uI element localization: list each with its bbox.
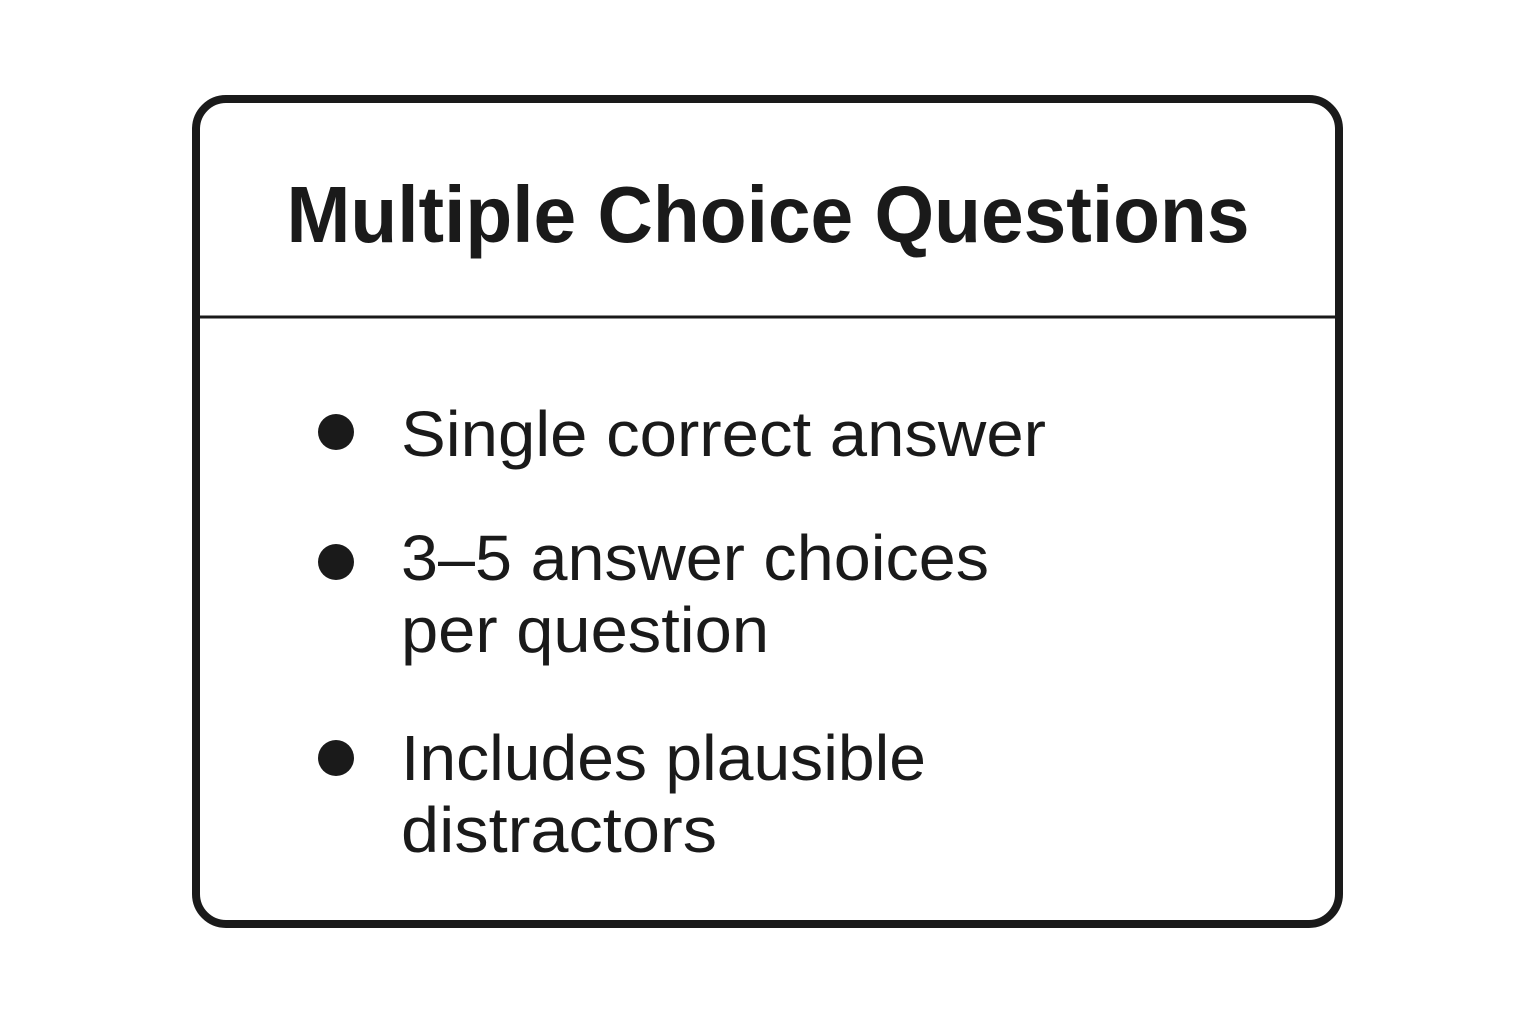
- bullet 3: Includes plausible: [401, 722, 926, 794]
- bullet 2: [318, 522, 989, 666]
- bullet 3: distractors: [401, 794, 717, 866]
- bullet list: [318, 398, 1046, 866]
- bullet 3: [318, 722, 926, 866]
- panel: multiple choice card: [196, 99, 1339, 924]
- title: Multiple Choice Questions: [286, 170, 1250, 259]
- bullet 2: 3–5 answer choices: [401, 522, 989, 594]
- bullet 2: per question: [401, 594, 769, 666]
- bullet 1: Single correct answer: [401, 398, 1046, 470]
